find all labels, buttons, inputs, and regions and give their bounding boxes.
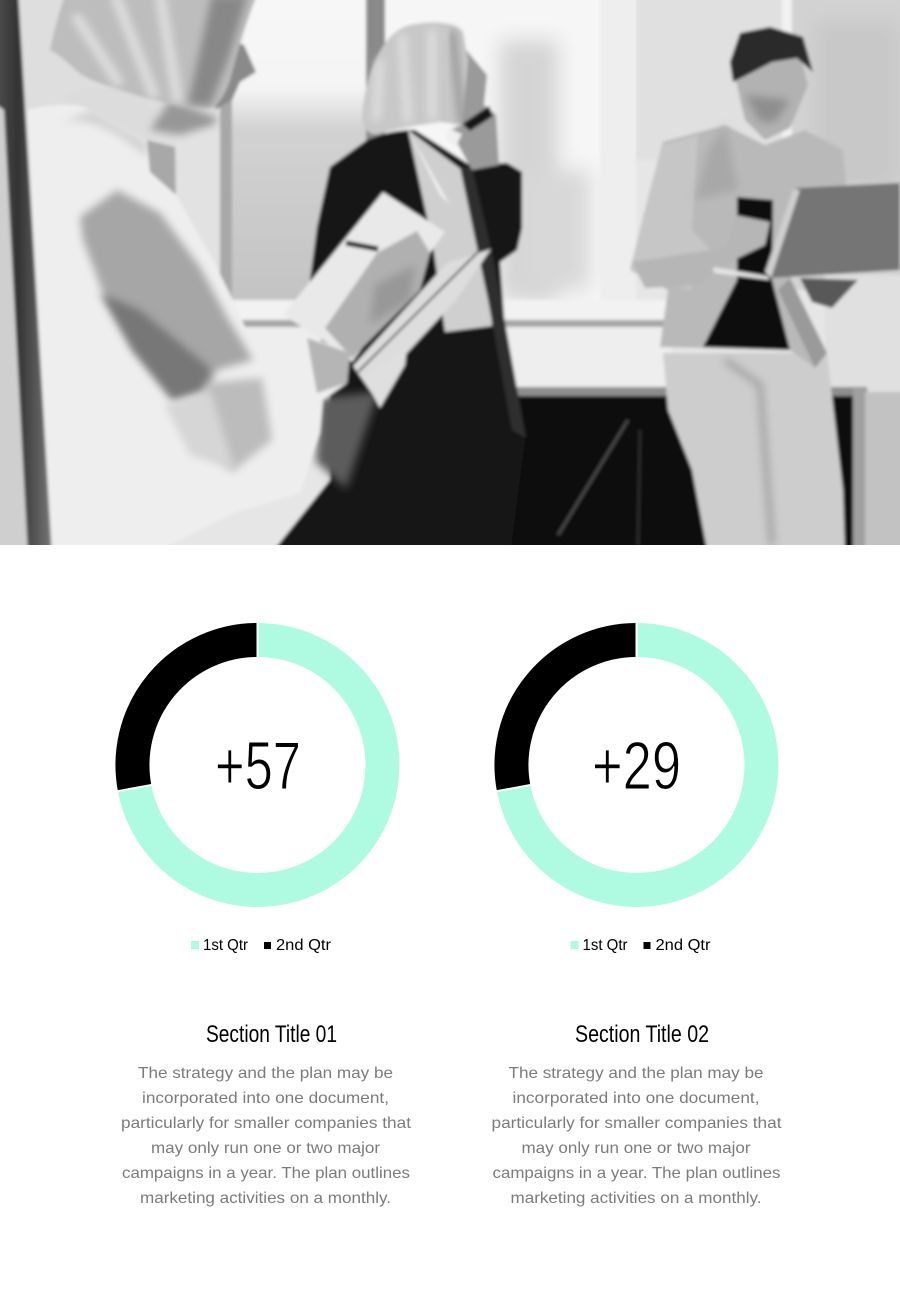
text block: section 01 body	[121, 1065, 412, 1207]
woman 1 hair	[50, 0, 257, 108]
notebook	[283, 192, 445, 362]
woman 3 blazer	[630, 125, 846, 368]
legend 2	[570, 937, 710, 954]
text block: section 02 body: The strategy and the plan may be	[508, 1065, 764, 1082]
legend 2: 2nd Qtr	[656, 937, 710, 954]
text block: section 02 body: campaigns in a year. The plan outlines	[492, 1165, 780, 1182]
woman 3 black top	[703, 197, 790, 350]
woman 2 jacket	[270, 130, 525, 555]
laptop hand	[800, 278, 858, 308]
text block: section 01 body: campaigns in a year. The plan outlines	[122, 1165, 410, 1182]
text block: section 01 body: The strategy and the plan may be	[138, 1065, 393, 1082]
woman 1 shirt	[27, 105, 350, 555]
woman 1 neck and face	[62, 88, 170, 135]
text block: section 01 body: may only run one or two major	[151, 1140, 381, 1157]
donut chart: +29	[495, 621, 761, 890]
text block: section 02 body: particularly for smaller companies that	[492, 1115, 782, 1132]
text block: section 02 body	[492, 1065, 782, 1207]
photo: three businesswomen by an office window	[0, 0, 900, 556]
value +29: +29	[592, 728, 681, 804]
shirt folds	[80, 190, 253, 400]
mint segment: 1st Qtr	[135, 640, 382, 890]
text block: section 02 body: incorporated into one document,	[512, 1090, 760, 1107]
text block: section 01 body: marketing activities on a monthly.	[140, 1190, 391, 1207]
text block: section 02 body: marketing activities on a monthly.	[510, 1190, 762, 1207]
woman 3 forearm and hand	[632, 215, 770, 288]
legend 2: 1st Qtr	[582, 937, 628, 954]
text block: section 01 body: particularly for smaller companies that	[121, 1115, 412, 1132]
left frame	[0, 106, 29, 545]
mint segment: 1st Qtr	[514, 640, 761, 890]
woman 2 hair	[362, 22, 468, 134]
woman 2 face and phone	[450, 45, 499, 170]
dark cabinet	[505, 387, 867, 396]
value +57: +57	[215, 728, 301, 804]
window views	[20, 0, 173, 143]
writing hand	[325, 231, 430, 358]
window sill	[232, 300, 672, 322]
woman 2 blouse	[408, 130, 492, 332]
text block: section 02 body: may only run one or two major	[522, 1140, 751, 1157]
heading: section title 01: Section Title 01	[206, 1021, 337, 1048]
black segment: 2nd Qtr	[132, 640, 258, 788]
legend 1: 2nd Qtr	[276, 937, 331, 954]
laptop	[770, 183, 900, 278]
donut chart: +57	[116, 621, 382, 890]
text block: section 01 body: incorporated into one document,	[142, 1090, 389, 1107]
heading: section title 02: Section Title 02	[575, 1021, 709, 1048]
legend 1: 1st Qtr	[203, 937, 248, 954]
black segment: 2nd Qtr	[511, 640, 636, 788]
woman 3 head	[734, 55, 808, 140]
woman 3 pants	[663, 353, 845, 555]
legend 1	[191, 937, 331, 954]
